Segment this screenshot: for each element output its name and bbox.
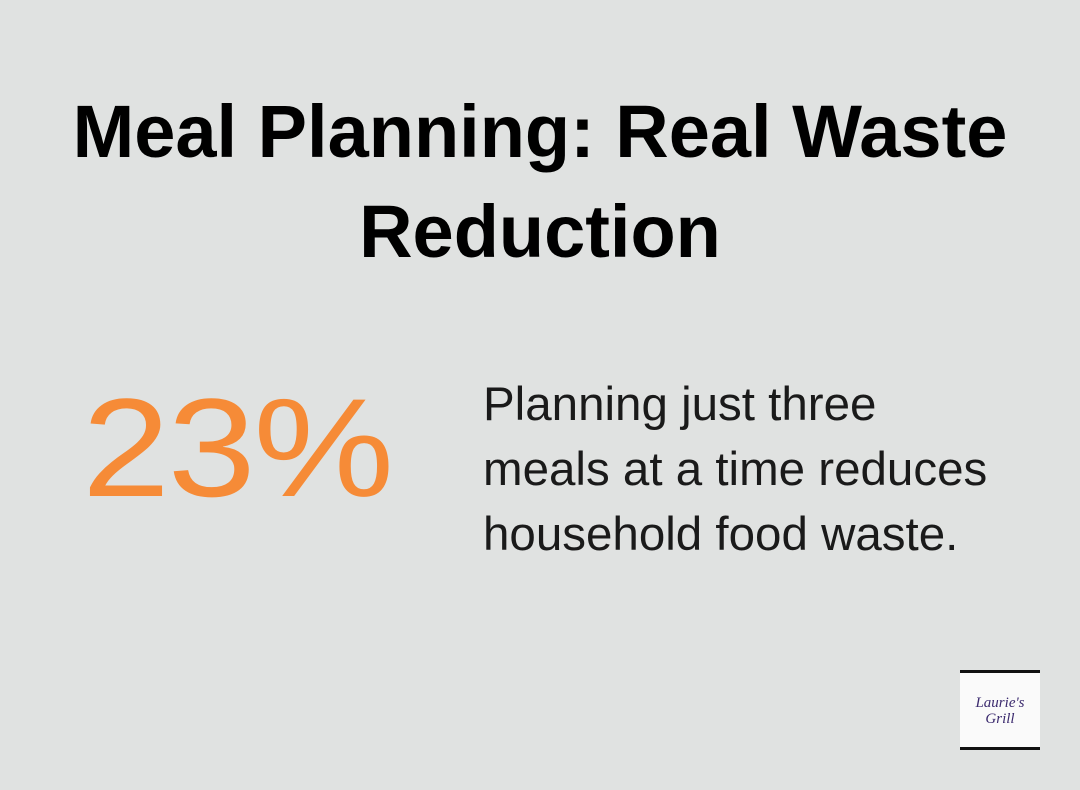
stat description (483, 378, 987, 561)
logo: Laurie's Grill (960, 670, 1040, 750)
title: Reduction (359, 190, 721, 273)
logo: Laurie's Grill: Grill (985, 711, 1015, 727)
stat description: household food waste. (483, 508, 958, 561)
title (73, 90, 1007, 273)
title: Meal Planning: Real Waste (73, 90, 1007, 173)
logo: Laurie's Grill: Laurie's (975, 695, 1025, 711)
stat description: meals at a time reduces (483, 443, 987, 496)
stat description: Planning just three (483, 378, 876, 431)
big stat: 23%: 23% (82, 369, 392, 526)
